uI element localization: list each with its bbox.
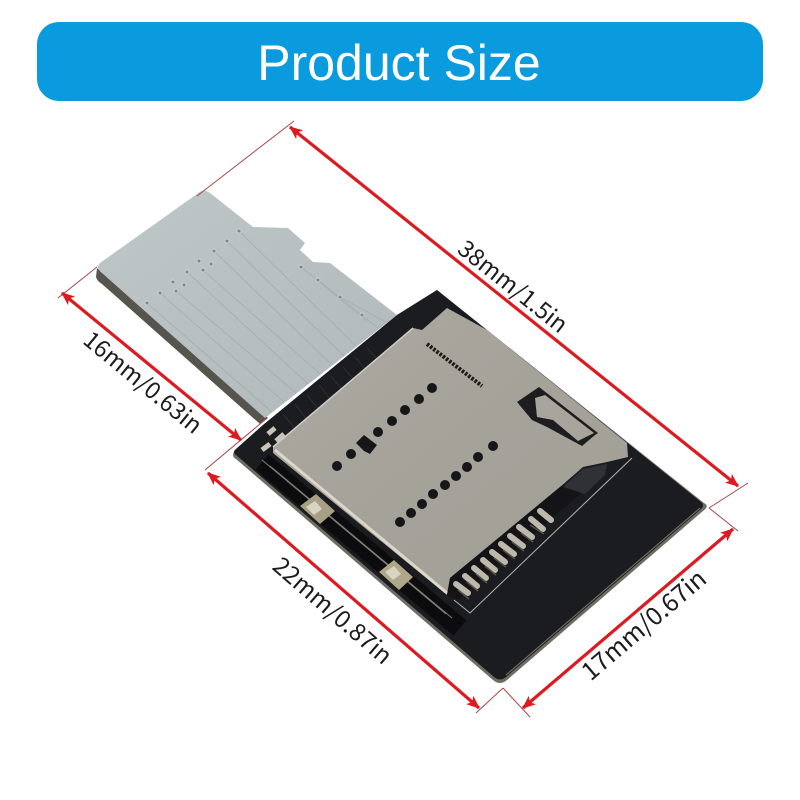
side components [262, 428, 632, 628]
label 22mm: 22mm/0.87in [267, 547, 401, 671]
product photo: SD adapter board [96, 191, 707, 683]
top hole row [332, 383, 437, 471]
title text: Product Size [257, 35, 541, 91]
dimension: 17mm width [523, 529, 733, 708]
label 16mm: 16mm/0.63in [77, 322, 211, 440]
title banner [37, 22, 763, 101]
black circuit board [233, 290, 707, 683]
dimension ticks [58, 121, 748, 717]
lower hole row [395, 441, 498, 527]
board connector traces [283, 348, 380, 431]
dimension: 16mm width [62, 293, 241, 440]
contact pins [456, 511, 551, 593]
dimension: 22mm length [208, 473, 479, 708]
label 38mm: 38mm/1.5in [452, 230, 576, 340]
metal card socket [273, 308, 628, 600]
dimension: 38mm length [290, 127, 738, 486]
slot perforation [427, 344, 482, 386]
spring cutout [517, 387, 598, 446]
label 17mm: 17mm/0.67in [573, 560, 713, 688]
micro SD card plug [96, 191, 397, 424]
